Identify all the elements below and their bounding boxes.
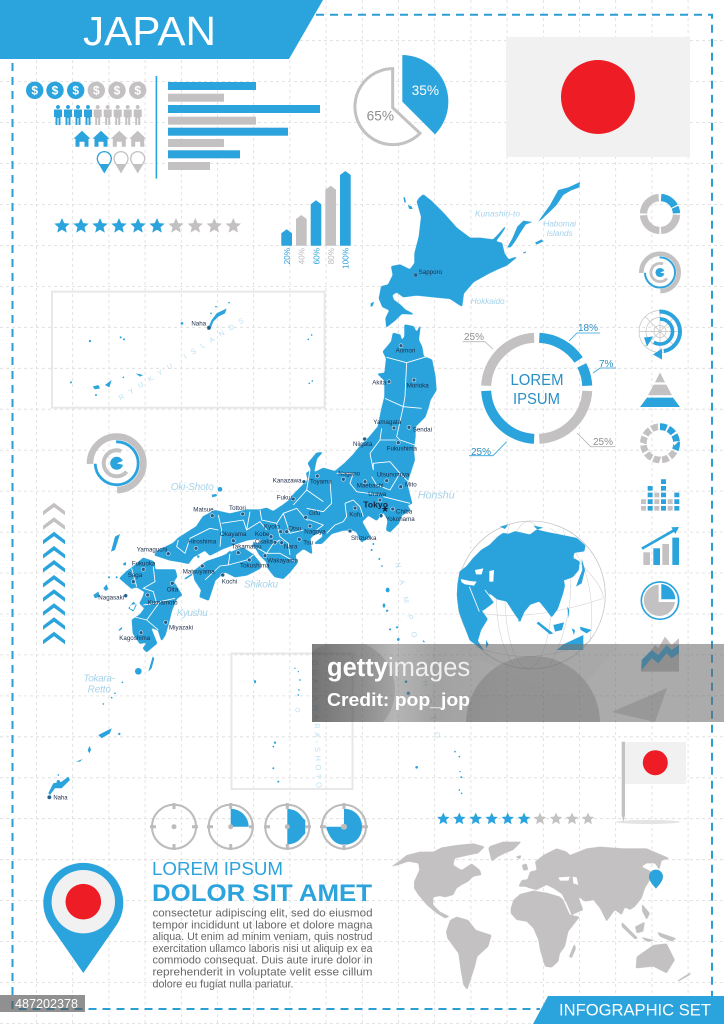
icon row stats: dollars, people, houses, pins [26,82,146,173]
city names: Kofu [349,512,363,519]
donut chart LOREM IPSUM: LOREM [510,372,564,389]
spiral chart icon left [90,437,143,490]
dollar icons: $ [134,84,141,98]
title banner: JAPAN [83,8,216,54]
chevrons column [43,503,65,644]
dollar icons: $ [31,84,38,98]
city names: Fukui [277,494,292,501]
watermark band [312,644,724,722]
city names: Sendai [413,427,432,434]
infographic set banner: INFOGRAPHIC SET [559,1000,711,1020]
city names: Tsu [303,539,313,546]
city names [98,347,432,642]
inset box: Ryukyu Islands [52,292,325,408]
city names: Osaka [255,538,273,545]
city names: Miyazaki [169,624,193,631]
icon: spiral chart [641,254,679,291]
city names: ★ [381,504,389,514]
city names: Mito [405,482,417,489]
donut chart LOREM IPSUM: 25% [593,437,613,448]
city names: Utsunomiya [377,472,410,479]
city names: Otsu [288,526,302,533]
city names: Yokohama [386,516,415,523]
infographic set banner [533,996,724,1024]
dollar icons: $ [72,84,79,98]
donut chart LOREM IPSUM: IPSUM [513,391,560,408]
title banner [0,0,323,59]
icon: square stacked bars [641,479,679,511]
city names: Saga [128,572,143,579]
Kyushu and southern islands: Retto [88,685,111,696]
city names: Tokushima [240,563,270,570]
arrow column chart with percentages: 40% [298,248,306,264]
city names: Nara [284,543,298,550]
clock dial charts [150,803,368,850]
people icons [54,105,142,125]
body paragraph: aliqua. Ut enim ad minim veniam, quis nostrud [152,931,373,943]
city names: Nagoya [304,528,326,535]
city names: Tokyo [363,500,388,510]
image id tag: 487202378 [15,997,78,1011]
donut chart LOREM IPSUM: 7% [599,359,614,370]
city names: Morioka [407,383,429,390]
Kyushu and southern islands: Tokara- [83,674,116,685]
small islands [184,494,258,579]
dollar icons: $ [114,84,121,98]
city markers [124,344,416,635]
watermark band: gettyimages [327,654,470,682]
icon: area chart [641,637,679,672]
city names: Nagasaki [98,594,124,601]
city names: Kyoto [264,524,280,531]
city names: Maebashi [357,482,384,489]
city names: Wakayama [267,558,299,565]
city names: Hiroshima [188,539,217,546]
Hokkaido: Kunashiri-to [475,209,520,219]
city names: Chiba [396,508,413,515]
donut chart LOREM IPSUM: 25% [464,332,484,343]
prefecture borders [177,357,427,562]
dollar icons: $ [52,84,59,98]
city names: Yamagata [373,419,402,426]
Kyushu and southern islands: Naha [53,795,68,801]
body paragraph: tempor incididunt ut labore et dolore magna [152,919,373,931]
body paragraph [152,908,373,990]
large map pin [43,863,123,973]
icon: rising bar chart with arrow [642,527,679,565]
city names: Yamaguchi [137,547,167,554]
body paragraph: commodo consequat. Duis aute irure dolor in [152,955,373,967]
arrow column chart with percentages [281,171,351,269]
city names: Okayama [220,531,247,538]
horizontal bar chart [156,76,320,179]
right icon column [639,198,681,672]
pie chart 35% / 65%: 65% [367,109,394,124]
city names: Aomori [396,347,415,354]
watermark band: Credit: pop_jop [327,690,470,710]
city names: Kumamoto [148,599,178,606]
Nampo and Ogasawara small islands [383,588,462,794]
icon: radar with arrows [639,310,681,360]
Hokkaido [371,182,580,327]
city names: Fukuoka [132,560,156,567]
icon: segmented ring [644,198,676,230]
region names: Oki-Shoto [171,482,214,493]
icon: dashed segmented ring [643,427,677,460]
Kyushu and southern islands [47,534,182,801]
Shikoku [193,548,260,600]
globe [457,521,605,669]
Hokkaido: Islands [547,228,573,238]
city names: Matsue [193,507,214,514]
world map with Japan pin [390,842,692,990]
city names: Gifu [309,510,321,517]
inset box: Ryukyu Islands: Naha [191,321,207,328]
arrow column chart with percentages: 80% [327,248,336,264]
city names: Kobe [255,531,270,538]
star rating row bottom [437,812,594,824]
dollar icons [26,82,146,99]
city names: Fukushima [387,446,418,453]
pie chart 35% / 65%: 35% [412,83,439,98]
star rating row top [54,218,241,233]
pie chart 35% / 65% [355,55,448,145]
arrow column chart with percentages: 60% [312,248,322,264]
map pin on Japan [649,870,663,889]
icon: pie in circle [641,582,679,619]
city names: Takamatsu [232,543,262,550]
city names: Oita [167,587,179,594]
city names: Tottori [229,505,246,512]
region names: Shikoku [244,580,278,591]
city names: Niigata [353,441,373,448]
Hokkaido: Sapporo [419,269,443,276]
city names: Toyama [310,478,332,485]
main map of Japan [47,182,580,801]
region names [171,482,455,619]
dollar icons: $ [93,84,100,98]
image id tag [0,995,85,1012]
Honshu [155,325,436,642]
region names: Kyushu [177,608,208,619]
heading: lorem ipsum dolor sit amet: LOREM IPSUM [152,858,283,879]
city names: Urawa [368,491,387,498]
map pin icons [97,152,145,173]
heading: lorem ipsum dolor sit amet [152,858,372,907]
city names: Akita [372,379,387,386]
Hokkaido: Hokkaido [471,296,505,306]
small flag on pole [616,742,686,824]
donut chart LOREM IPSUM: 25% [471,447,491,458]
body paragraph: reprehenderit in voluptate velit esse cillum [152,966,373,978]
donut chart LOREM IPSUM [463,323,616,458]
city names: Kanazawa [273,477,302,484]
city names: Matsuyama [183,568,215,575]
inset box: Ryukyu Islands: RYUKYU ISLANDS [117,316,246,402]
donut chart LOREM IPSUM: 18% [578,323,598,334]
Hokkaido: Habomai [543,219,577,229]
city names: Nagano [338,471,361,478]
icon: pyramid [640,372,680,407]
heading: lorem ipsum dolor sit amet: DOLOR SIT AMET [152,880,372,907]
region names: Honshu [418,489,455,501]
body paragraph: exercitation ullamco laboris nisi ut aliquip ex ea [152,943,373,955]
arrow column chart with percentages: 100% [342,248,350,269]
arrow column chart with percentages: 20% [283,248,292,264]
house icons [74,131,146,147]
body paragraph: consectetur adipiscing elit, sed do eiusmod [152,908,373,920]
flag of Japan [506,37,690,157]
city names: Shizuoka [351,535,377,542]
city names: Kochi [222,579,237,586]
inset box: Ogasawara-Shoto: OGASAWARA-SHOTO [310,660,323,788]
inset box: Ogasawara-Shoto: NAMPO-SHOTO [393,561,442,739]
city names: Kagoshima [119,635,151,642]
body paragraph: dolore eu fugiat nulla pariatur. [152,978,294,990]
inset box: Ogasawara-Shoto [232,561,442,789]
